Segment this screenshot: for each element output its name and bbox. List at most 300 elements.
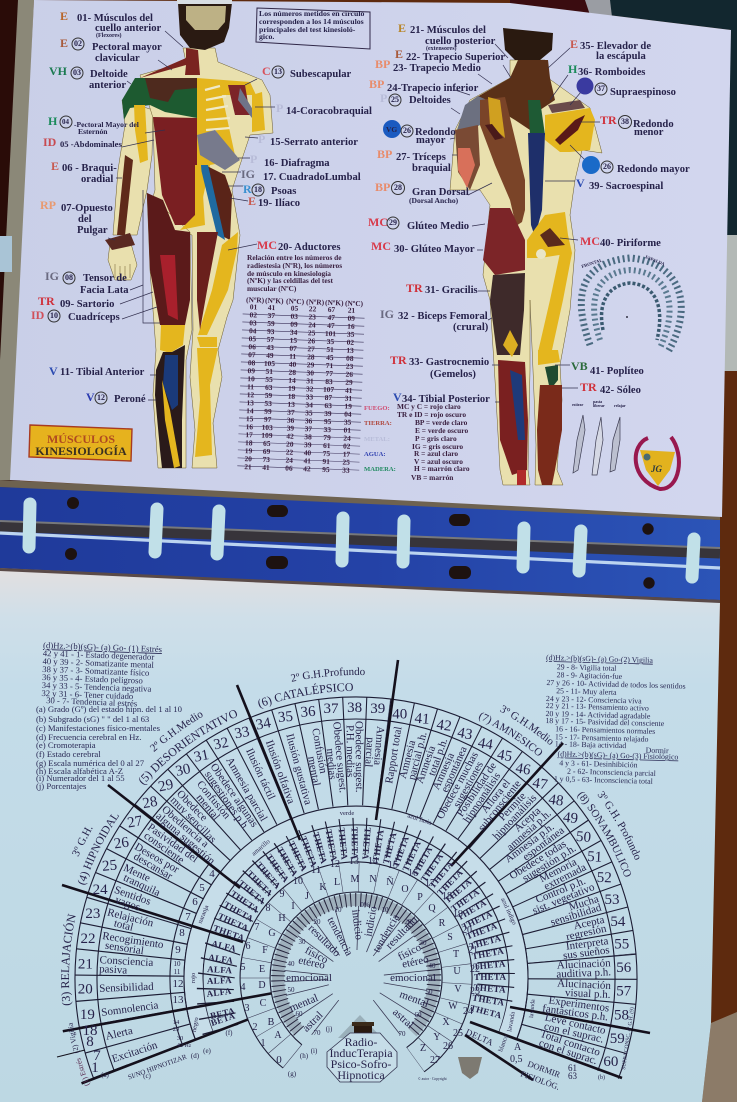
inner body level labels: emocional bbox=[390, 972, 436, 984]
centre emblem: Radio-InducTerapia bbox=[327, 1015, 397, 1082]
stage numbers 7 to 60: 60 bbox=[603, 1054, 618, 1070]
table: muscle numbers: 34 bbox=[305, 400, 313, 409]
cell descriptions: left and upper left: Excitación bbox=[110, 1039, 159, 1065]
left legend: key (a) to (j): (d) Frecuencia cerebral en Hz. bbox=[36, 732, 141, 742]
table: muscle numbers: 08 bbox=[248, 358, 256, 367]
table: muscle numbers: 16 bbox=[347, 322, 355, 331]
right legend: vigilia and sleep: 4 y 3 - 61- Desinhibición bbox=[559, 758, 638, 769]
blue marker VG right bbox=[582, 156, 600, 174]
table: muscle numbers: 37 bbox=[287, 408, 295, 417]
pelvis bbox=[527, 212, 572, 258]
brainwave labels: THETA bbox=[275, 845, 300, 878]
inner spoke lines bbox=[284, 906, 428, 1035]
colour legend: elements: BP = verde claro bbox=[415, 418, 468, 427]
cell descriptions: upper right and right: sensibilidad bbox=[549, 901, 603, 929]
tick gauge ring bbox=[278, 900, 434, 1032]
table: muscle numbers: 29 bbox=[345, 378, 353, 387]
brainwave labels: THETA bbox=[286, 840, 310, 873]
table: muscle numbers: 87 bbox=[325, 393, 333, 402]
colour legend: elements: AGUA: bbox=[364, 451, 386, 458]
table: muscle numbers: 69 bbox=[263, 447, 271, 456]
letter and number scale: 8 bbox=[266, 903, 270, 914]
table: muscle numbers: 06 bbox=[285, 464, 293, 473]
centre emblem: Radio-InducTerapia: InducTerapia bbox=[329, 1046, 393, 1060]
right shoulder bbox=[545, 108, 595, 152]
left legend: key (a) to (j): (b) Subgrado (sG) " " del 1 al 63 bbox=[36, 714, 149, 724]
cell descriptions: left and upper left: sensorial bbox=[104, 940, 145, 957]
table: muscle numbers: 25 bbox=[308, 328, 316, 338]
muscle labels: back left column: P bbox=[380, 91, 387, 105]
table: muscle numbers: 43 bbox=[266, 343, 274, 352]
colour legend: elements: R = azul claro bbox=[414, 449, 458, 458]
right legend: vigilia and sleep: 24 y 23 - 12- Consciencia viva bbox=[546, 694, 642, 706]
letter and number scale: Y bbox=[433, 1032, 441, 1043]
cell descriptions: upper right and right: con el suprac. bbox=[537, 1037, 599, 1067]
table: muscle numbers: 11 bbox=[289, 352, 297, 361]
muscle labels: back left column: BP bbox=[369, 77, 384, 91]
centre emblem: Radio-InducTerapia: Radio- bbox=[345, 1035, 377, 1049]
percentage scale: 70 bbox=[314, 1029, 321, 1037]
brainwave labels: THETA bbox=[298, 835, 319, 869]
note box: numbers in circles: Los números metidos en círculo bbox=[259, 9, 365, 18]
table: muscle numbers: 03 bbox=[249, 318, 257, 327]
stage numbers 7 to 60: 1 bbox=[91, 1060, 99, 1076]
brainwave labels: THETA bbox=[264, 852, 291, 884]
inner body level labels: mental bbox=[398, 988, 430, 1010]
letter and number scale: V bbox=[454, 984, 462, 995]
brainwave labels: THETA bbox=[217, 911, 250, 933]
inner body level labels: resultado bbox=[306, 922, 343, 960]
letter and number scale: 4 bbox=[240, 982, 246, 993]
muscle labels: back left column: 24-Trapecio inferior bbox=[387, 83, 479, 94]
colour band names: azul índigo bbox=[499, 897, 518, 926]
column key letters below the scale: (e) bbox=[203, 1047, 212, 1055]
table: muscle numbers: 36 bbox=[287, 416, 295, 425]
stage numbers 7 to 60: 27 bbox=[126, 813, 144, 832]
relation note above table: muscular (NºC) bbox=[247, 284, 297, 293]
deep sleep segment: 0,5 bbox=[510, 1054, 522, 1065]
cell descriptions: upper right and right: Obedece muchas bbox=[434, 750, 481, 821]
colour band names: azul fusia bbox=[406, 812, 433, 827]
stage numbers 7 to 60: 49 bbox=[562, 810, 579, 827]
letter and number scale: 13 bbox=[349, 856, 359, 867]
small subgrade numerators: 10 bbox=[174, 960, 181, 968]
muscle labels: back left column: Gran Dorsal bbox=[412, 187, 469, 198]
metal rod bbox=[0, 526, 720, 553]
table: muscle numbers: 71 bbox=[326, 361, 334, 370]
table: muscle numbers: 105 bbox=[264, 359, 275, 368]
table: muscle numbers: 42 bbox=[286, 432, 294, 441]
small subgrade numerators: 6 bbox=[192, 896, 198, 908]
cell descriptions: upper right and right: Total contacto bbox=[538, 1028, 602, 1059]
table: muscle numbers: 47 bbox=[327, 321, 335, 330]
table: muscle numbers: 53 bbox=[264, 399, 272, 408]
letter and number scale: P bbox=[417, 892, 423, 903]
cell descriptions: left and upper left: mental bbox=[194, 792, 222, 823]
stage numbers 7 to 60: 38 bbox=[347, 700, 362, 716]
colour legend: elements: FUEGO: bbox=[364, 405, 390, 412]
table: muscle numbers: 13 bbox=[346, 346, 354, 355]
cell descriptions: upper right and right: Alucinación bbox=[557, 977, 612, 992]
chart: ear reflex map: ESPALDA bbox=[645, 254, 666, 267]
brainwave labels: THETA bbox=[449, 887, 481, 914]
muscle labels: front left column: Deltoide bbox=[90, 69, 128, 80]
stage numbers 7 to 60: 28 bbox=[141, 794, 159, 812]
muscle labels: front left column: 03 bbox=[73, 68, 81, 77]
muscle labels: front right column: 14-Coracobraquial bbox=[286, 106, 372, 117]
cell descriptions: upper right and right: con el suprac. bbox=[543, 1020, 605, 1046]
muscle labels: back right column: 37 bbox=[597, 84, 605, 93]
muscle labels: front right column: R bbox=[243, 182, 252, 196]
table: muscle numbers: 34 bbox=[290, 328, 298, 337]
deep sleep segment: (b) bbox=[598, 1074, 605, 1081]
right legend: vigilia and sleep: 2 - 62- Inconsciencia parcial bbox=[567, 767, 657, 778]
inner body level labels: etéreo bbox=[401, 953, 430, 971]
muscle labels: front left column: IG bbox=[45, 269, 59, 283]
cell descriptions: upper right and right: Rapport total bbox=[383, 726, 405, 785]
table: muscle numbers: 20 bbox=[286, 440, 294, 449]
table: muscle numbers: 24 bbox=[343, 434, 351, 443]
front body figure bbox=[105, 0, 273, 468]
stage numbers 7 to 60 bbox=[78, 700, 632, 1076]
muscle labels: back right column: Supraespinoso bbox=[610, 87, 676, 98]
inner body level labels: astral bbox=[300, 1009, 326, 1035]
percentage scale: 60 bbox=[296, 1010, 303, 1018]
scale title arcs: 3º G.H. bbox=[72, 826, 92, 856]
centre emblem: Radio-InducTerapia: Hipnotica bbox=[337, 1068, 385, 1082]
table: muscle numbers: 37 bbox=[304, 424, 313, 433]
table: muscle numbers: 28 bbox=[307, 352, 315, 361]
relation note above table: Relación entre los números de bbox=[247, 253, 342, 262]
left legend: stress states: (d)Hz.>(b)(sG)- (a) Go- (1) Estrés bbox=[43, 640, 163, 654]
table: muscle numbers: (NºC) bbox=[345, 299, 364, 308]
table: muscle numbers: 27 bbox=[307, 344, 315, 354]
letter and number scale: 6 bbox=[246, 941, 250, 952]
inner body level labels: físico bbox=[303, 944, 330, 967]
cell descriptions: left and upper left: Obediencia a bbox=[159, 803, 211, 850]
letter and number scale: J bbox=[305, 891, 309, 902]
letter and number scale: 26 bbox=[443, 1041, 453, 1052]
letter and number scale: 10 bbox=[293, 876, 303, 887]
percentage scale: 20 bbox=[404, 918, 412, 926]
table: muscle numbers: 40 bbox=[304, 448, 312, 457]
knees bbox=[160, 325, 185, 353]
right legend: vigilia and sleep: 15 - 17- Pensamiento relajado bbox=[555, 732, 649, 744]
cell descriptions: upper right and right: visual p.h. bbox=[565, 987, 611, 1001]
stage numbers 7 to 60: 19 bbox=[80, 1007, 95, 1023]
cell descriptions: upper right and right: sist. vegetativo bbox=[531, 881, 597, 917]
stage numbers 7 to 60: 53 bbox=[605, 892, 620, 908]
muscle labels: front right column: P bbox=[250, 152, 257, 166]
inner body level labels: tendencia bbox=[371, 912, 402, 955]
percentage scale: 10 bbox=[382, 906, 389, 914]
muscle labels: back left column: 21- Músculos del bbox=[410, 25, 486, 36]
small subgrade numerators: 4 bbox=[209, 868, 215, 880]
cell descriptions: upper right and right: Amnesia bbox=[397, 739, 418, 780]
muscle labels: back left column: BP bbox=[377, 147, 392, 161]
small subgrade numerators: 29 bbox=[173, 1026, 179, 1033]
muscle labels: front left column: 11- Tibial Anterior bbox=[60, 367, 145, 378]
cell descriptions: upper right and right: Acepta bbox=[512, 805, 543, 835]
cell descriptions: left and upper left: medias bbox=[324, 748, 339, 780]
cell descriptions: left and upper left: Ilusión olfativa bbox=[263, 739, 297, 806]
table: muscle numbers: 19 bbox=[245, 446, 253, 455]
muscle labels: back right column: E bbox=[570, 37, 578, 51]
cell descriptions: left and upper left: Alerta bbox=[104, 1025, 134, 1043]
letter and number scale bbox=[240, 856, 480, 1066]
letter and number scale: D bbox=[258, 980, 266, 991]
muscle labels: front left column: 05 -Abdominales bbox=[60, 139, 122, 149]
stage numbers 7 to 60: 46 bbox=[514, 760, 532, 779]
muscle labels: back right column: 39- Sacroespinal bbox=[589, 181, 663, 192]
cell descriptions: left and upper left: sugestiones p.h. bbox=[202, 769, 252, 833]
right legend: vigilia and sleep: 27 y 26 - 10- Actividad de todos los sentidos bbox=[546, 678, 686, 691]
muscle labels: front left column: Tensor de bbox=[83, 273, 127, 284]
colour band names: negro bbox=[191, 1017, 200, 1033]
femur and right leg bbox=[538, 253, 572, 352]
brainwave labels: BETA bbox=[209, 1006, 236, 1021]
muscle labels: back left column: MC bbox=[368, 215, 388, 229]
letter and number scale: 11 bbox=[311, 865, 321, 876]
table: muscle numbers: 18 bbox=[288, 392, 296, 401]
table: muscle numbers: 24 bbox=[308, 320, 316, 330]
letter and number scale: 16 bbox=[408, 868, 418, 879]
muscle labels: front right column: IG bbox=[241, 167, 255, 181]
right legend: vigilia and sleep: 16 - 16- Pensamientos normales bbox=[555, 724, 655, 736]
cell descriptions: left and upper left: pasiva bbox=[99, 963, 128, 977]
logo: crest with ring: JG bbox=[650, 464, 662, 474]
leader lines bbox=[108, 31, 600, 402]
table: muscle numbers: 33 bbox=[306, 392, 314, 401]
scale title arcs: (5) DESORIENTATIVO bbox=[139, 710, 237, 785]
cell descriptions: upper right and right: Acepta bbox=[573, 914, 606, 932]
left legend: key (a) to (j): (i) Numerador del 1 al 55 bbox=[36, 773, 125, 783]
muscle labels: back left column: IG bbox=[380, 307, 394, 321]
cell descriptions: upper right and right: sus sueños bbox=[562, 944, 610, 962]
muscle labels: back right column: la escápula bbox=[596, 51, 646, 62]
stage numbers 7 to 60: 43 bbox=[456, 725, 474, 743]
brainwave labels: THETA bbox=[222, 899, 255, 924]
cell descriptions: left and upper left: Mente bbox=[121, 862, 152, 885]
table: muscle numbers: 65 bbox=[263, 439, 271, 448]
cell descriptions: upper right and right: espontánea bbox=[520, 824, 567, 863]
trapezius bbox=[477, 60, 555, 130]
stage numbers 7 to 60: 55 bbox=[614, 936, 629, 952]
brainwave labels: THETA bbox=[474, 972, 507, 982]
letter and number scale: T bbox=[453, 949, 459, 960]
table: muscle numbers: 02 bbox=[249, 310, 257, 319]
muscle labels: back left column: 29 bbox=[389, 218, 397, 227]
muscle labels: back right column: MC bbox=[580, 234, 600, 248]
right legend: vigilia and sleep: Dormir bbox=[646, 746, 669, 755]
muscle labels: front right column: 19- Ilíaco bbox=[258, 198, 300, 209]
cell descriptions: left and upper left: muy sencillas bbox=[168, 794, 219, 846]
small subgrade numerators: 11 bbox=[174, 968, 181, 976]
muscle labels: back left column: 33- Gastrocnemio bbox=[409, 357, 489, 368]
left legend: stress states: 32 y 31 - 6- Tener cuidado bbox=[41, 688, 134, 701]
cell descriptions: upper right and right: Control p.h. bbox=[534, 875, 588, 906]
cell descriptions: left and upper left: Ilusión táctil bbox=[243, 746, 277, 802]
table: muscle numbers: 73 bbox=[262, 455, 270, 464]
cell descriptions: left and upper left: Confusión bbox=[194, 778, 233, 822]
muscle spindle icons bbox=[572, 399, 626, 475]
small subgrade numerators: 7 bbox=[185, 911, 191, 923]
table: muscle numbers: 49 bbox=[266, 351, 274, 360]
cell descriptions: left and upper left: descansar bbox=[131, 851, 175, 883]
table: muscle numbers: (NºR) bbox=[306, 297, 325, 307]
table: muscle numbers: 107 bbox=[323, 385, 335, 394]
right legend: vigilia and sleep: (d)Hz.>(b)(sG)- (a) Go-(3) Fisiológico bbox=[557, 749, 679, 761]
table: muscle numbers: 99 bbox=[264, 407, 272, 416]
left legend: stress states: 40 y 39 - 2- Somatizante mental bbox=[42, 656, 155, 670]
stage numbers 7 to 60: 44 bbox=[477, 735, 495, 754]
cell descriptions: left and upper left: Consciencia bbox=[99, 954, 154, 969]
inner body level labels: indicio bbox=[362, 905, 380, 938]
relation note above table: radiestesia (NºR), los números bbox=[247, 261, 342, 270]
title box: Músculos Kinesiología: MÚSCULOS bbox=[47, 432, 115, 446]
column key letters below the scale: (f) bbox=[226, 1029, 233, 1037]
table: muscle numbers: 83 bbox=[325, 377, 333, 386]
table: muscle numbers: 51 bbox=[326, 345, 334, 354]
deep sleep segment bbox=[510, 999, 636, 1092]
stage numbers 7 to 60: 41 bbox=[414, 711, 430, 728]
colour legend: elements: V = azul oscuro bbox=[414, 457, 463, 466]
letter and number scale: 7 bbox=[254, 922, 260, 933]
column key letters below the scale: (g) bbox=[288, 1070, 297, 1078]
table: muscle numbers: 63 bbox=[265, 383, 273, 392]
muscle labels: back left column: 28 bbox=[394, 183, 402, 192]
percentage scale: 30 bbox=[420, 939, 427, 947]
right legend: vigilia and sleep: 1 y 0,5 - 63- Inconsciencia total bbox=[554, 774, 654, 786]
table: muscle numbers: 101 bbox=[325, 329, 337, 338]
deep sleep segment: A bbox=[514, 1042, 522, 1053]
brainwave labels: THETA bbox=[350, 827, 360, 860]
table: muscle numbers: 61 bbox=[323, 441, 331, 450]
right legend: vigilia and sleep: 14 - 18- Baja actividad bbox=[555, 739, 626, 750]
inner body level labels: indicio bbox=[349, 909, 365, 941]
table: muscle numbers bbox=[237, 295, 365, 475]
left legend: stress states bbox=[41, 640, 163, 709]
left lower leg muscles bbox=[155, 345, 185, 468]
colour legend: elements: TIERRA: bbox=[364, 420, 392, 427]
table: muscle numbers: (NºK) bbox=[265, 296, 284, 305]
front head bbox=[178, 3, 232, 50]
muscle labels: back left column: 31- Gracilis bbox=[425, 285, 478, 296]
percentage scale: 30 bbox=[298, 938, 306, 946]
column key letters below the scale: Hz bbox=[185, 1043, 192, 1049]
muscle labels: front left column: E bbox=[60, 36, 68, 50]
table: muscle numbers: 77 bbox=[325, 369, 333, 378]
muscle labels: back right column: TR bbox=[580, 380, 597, 394]
cell descriptions: upper right and right: Leve contacto bbox=[544, 1011, 607, 1037]
muscle labels: front left column: del bbox=[78, 214, 92, 225]
cell descriptions: upper right and right: fantásticos p.h. bbox=[541, 1003, 609, 1024]
muscle labels: back right column: 35- Elevador de bbox=[580, 41, 651, 52]
grey diaphragm bbox=[197, 130, 240, 170]
cell descriptions: left and upper left: Sentidos bbox=[113, 884, 152, 908]
left humerus bbox=[134, 105, 148, 163]
left legend: stress states: 30 - 7- Tendencia al estrés bbox=[46, 695, 138, 708]
table: muscle numbers: 41 bbox=[268, 303, 276, 312]
table: muscle numbers: 20 bbox=[244, 454, 252, 463]
scale title arcs: (3) RELAJACIÓN bbox=[61, 914, 76, 1006]
back head bbox=[503, 28, 553, 60]
small crest and copyright: © autor · Copyright bbox=[418, 1076, 447, 1081]
right legend: vigilia and sleep: 22 y 21 - 13- Pensamiento activo bbox=[546, 701, 649, 713]
cell descriptions: upper right and right: parcial p.h. bbox=[406, 730, 430, 781]
deep sleep segment: lavanda bbox=[529, 999, 537, 1018]
note box: numbers in circles: principales del test kinesioló- bbox=[259, 25, 356, 34]
muscle labels: front left column: V bbox=[49, 364, 58, 378]
letter and number scale: Ñ bbox=[386, 876, 394, 888]
cell descriptions: upper right and right: espontánea bbox=[439, 745, 470, 794]
muscle labels: front left column: 02 bbox=[74, 39, 82, 48]
left legend: stress states: 36 y 35 - 4- Estado peligroso bbox=[42, 672, 144, 686]
muscle labels: back right column: 40- Piriforme bbox=[600, 238, 661, 249]
letter and number scale: 27 bbox=[430, 1055, 440, 1066]
stage numbers 7 to 60: 26 bbox=[113, 834, 130, 852]
table: muscle numbers: 33 bbox=[323, 425, 331, 434]
right femur bbox=[198, 232, 238, 335]
table: muscle numbers: 09 bbox=[247, 366, 255, 375]
inner body level labels: emocional bbox=[286, 972, 332, 984]
right legend: vigilia and sleep: 28 - 9- Agitación-fue bbox=[556, 670, 623, 681]
colour legend: elements: METAL: bbox=[364, 436, 390, 443]
scale title arcs: (7) AMNESICO bbox=[478, 712, 542, 756]
cell descriptions: upper right and right: hipnoanálisis bbox=[491, 792, 539, 842]
small subgrade numerators: 42 bbox=[177, 1042, 183, 1049]
table: muscle numbers: 35 bbox=[305, 408, 313, 417]
letter and number scale: N bbox=[369, 874, 377, 885]
percentage scale: 10 bbox=[334, 906, 342, 914]
cell descriptions: left and upper left: Deseos por bbox=[132, 841, 181, 876]
muscle labels: back left column: Glúteo Medio bbox=[407, 221, 469, 232]
chest and deltoid muscles bbox=[122, 78, 197, 120]
table: muscle numbers: 22 bbox=[309, 304, 317, 314]
letter and number scale: 0 bbox=[276, 1054, 282, 1066]
brainwave labels: THETA bbox=[212, 923, 246, 943]
muscle labels: back left column: (extensores) bbox=[426, 45, 457, 52]
brainwave labels: THETA bbox=[337, 827, 350, 861]
muscle labels: back right column: V bbox=[576, 176, 585, 190]
cell descriptions: upper right and right: Amnesia p.h. bbox=[503, 821, 557, 865]
left legend: key (a) to (j): (a) Grado (Gº) del estado hipn. del 1 al 10 bbox=[36, 704, 183, 714]
muscle labels: back left column: E bbox=[398, 21, 406, 35]
table: muscle numbers: 19 bbox=[344, 402, 352, 411]
table: muscle numbers: 59 bbox=[267, 319, 275, 328]
muscle labels: front left column: cuello anterior bbox=[95, 23, 161, 34]
table: muscle numbers: 08 bbox=[346, 354, 354, 363]
muscle labels: front right column: 16- Diafragma bbox=[264, 158, 330, 169]
cell descriptions: left and upper left: total bbox=[113, 917, 134, 934]
stage numbers 7 to 60: 47 bbox=[531, 775, 549, 793]
cell descriptions: left and upper left: Obedece sugest. bbox=[330, 721, 349, 794]
cell descriptions: left and upper left bbox=[99, 721, 386, 1065]
stage numbers 7 to 60: 58 bbox=[614, 1007, 629, 1023]
cell descriptions: left and upper left: alguna sugestión bbox=[153, 810, 218, 868]
column key letters below the scale: SI/NO HIPNOTIZAR bbox=[127, 1053, 188, 1081]
binding strip with rings bbox=[0, 480, 720, 603]
letter and number scale: X bbox=[442, 1017, 450, 1028]
table: muscle numbers: 05 bbox=[291, 304, 299, 313]
table: muscle numbers: 09 bbox=[290, 320, 298, 329]
plastic rings bbox=[29, 504, 694, 577]
table: muscle numbers: 95 bbox=[322, 465, 330, 474]
muscle labels: back left column: BP bbox=[375, 57, 390, 71]
percentage scale: 40 bbox=[428, 962, 436, 970]
left legend: stress states: 34 y 33 - 5- Tendencia negativa bbox=[42, 680, 152, 694]
muscle labels: back left column: 23- Trapecio Medio bbox=[393, 63, 481, 74]
